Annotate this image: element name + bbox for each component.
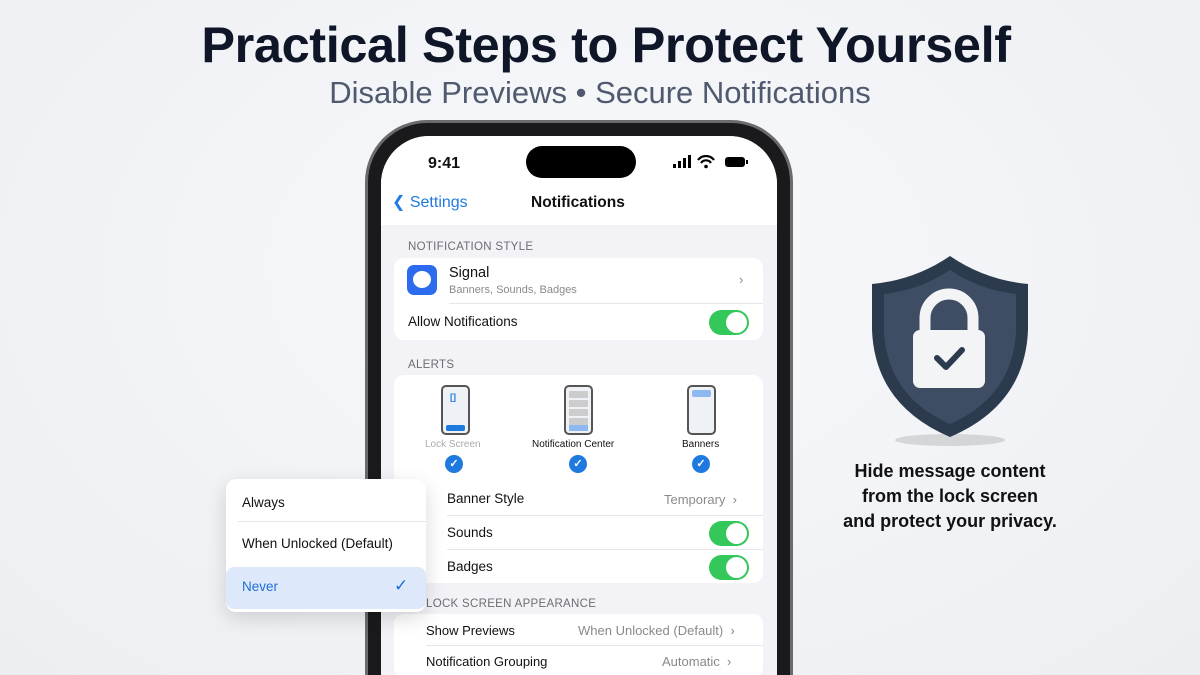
card: alerts: Temporary › bbox=[664, 492, 737, 507]
card: signal: Allow Notifications bbox=[408, 314, 518, 329]
label: notification style: NOTIFICATION STYLE bbox=[408, 241, 533, 253]
back button: ❮ Settings bbox=[392, 194, 468, 211]
card: alerts: ✓ bbox=[696, 458, 706, 470]
status icons bbox=[673, 155, 748, 168]
card: alerts: Banner Style bbox=[447, 491, 524, 506]
alert icons bbox=[441, 385, 470, 435]
card: signal: Banners, Sounds, Badges bbox=[449, 284, 577, 296]
caption text: and protect your privacy. bbox=[843, 511, 1057, 531]
alert icons: [] bbox=[450, 392, 456, 402]
dynamic island bbox=[526, 146, 636, 178]
card: alerts: Badges bbox=[447, 559, 493, 574]
selected option: ✓ bbox=[394, 576, 408, 595]
title: Practical Steps to Protect Yourself bbox=[201, 16, 1011, 73]
card: lock screen: Automatic › bbox=[662, 654, 731, 669]
card: signal: Signal bbox=[449, 265, 489, 281]
card: alerts: ✓ bbox=[449, 458, 459, 470]
card: signal: › bbox=[739, 272, 743, 287]
icon: shield with lock bbox=[872, 256, 1028, 446]
nav title: Notifications bbox=[531, 194, 625, 211]
card: alerts: Banners bbox=[682, 439, 719, 450]
phone bbox=[365, 120, 793, 675]
selected option: Never bbox=[242, 579, 278, 594]
card: alerts: Sounds bbox=[447, 525, 493, 540]
status bar time: 9:41 bbox=[428, 155, 460, 172]
subtitle: Disable Previews • Secure Notifications bbox=[329, 75, 871, 110]
card: signal bbox=[394, 258, 763, 340]
card: alerts: Notification Center bbox=[532, 439, 614, 450]
header area bbox=[381, 136, 777, 225]
popup menu: preview options: When Unlocked (Default) bbox=[242, 536, 393, 551]
popup menu: preview options: Always bbox=[242, 495, 285, 510]
label: alerts: ALERTS bbox=[408, 359, 454, 371]
label: lock screen appearance: LOCK SCREEN APPEARANCE bbox=[426, 598, 596, 610]
popup menu: preview options bbox=[226, 479, 426, 612]
caption text: Hide message content bbox=[854, 461, 1046, 481]
card: lock screen: When Unlocked (Default) › bbox=[578, 623, 735, 638]
card: lock screen: Show Previews bbox=[426, 623, 515, 638]
signal icon bbox=[407, 265, 437, 295]
card: alerts bbox=[394, 375, 763, 583]
card: lock screen bbox=[394, 614, 763, 675]
selected option bbox=[226, 567, 426, 609]
phone screen bbox=[381, 136, 777, 675]
card: alerts: ✓ bbox=[573, 458, 583, 470]
card: lock screen: Notification Grouping bbox=[426, 654, 547, 669]
card: alerts: Lock Screen bbox=[425, 439, 481, 450]
caption text bbox=[843, 461, 1057, 531]
caption text: from the lock screen bbox=[862, 486, 1038, 506]
